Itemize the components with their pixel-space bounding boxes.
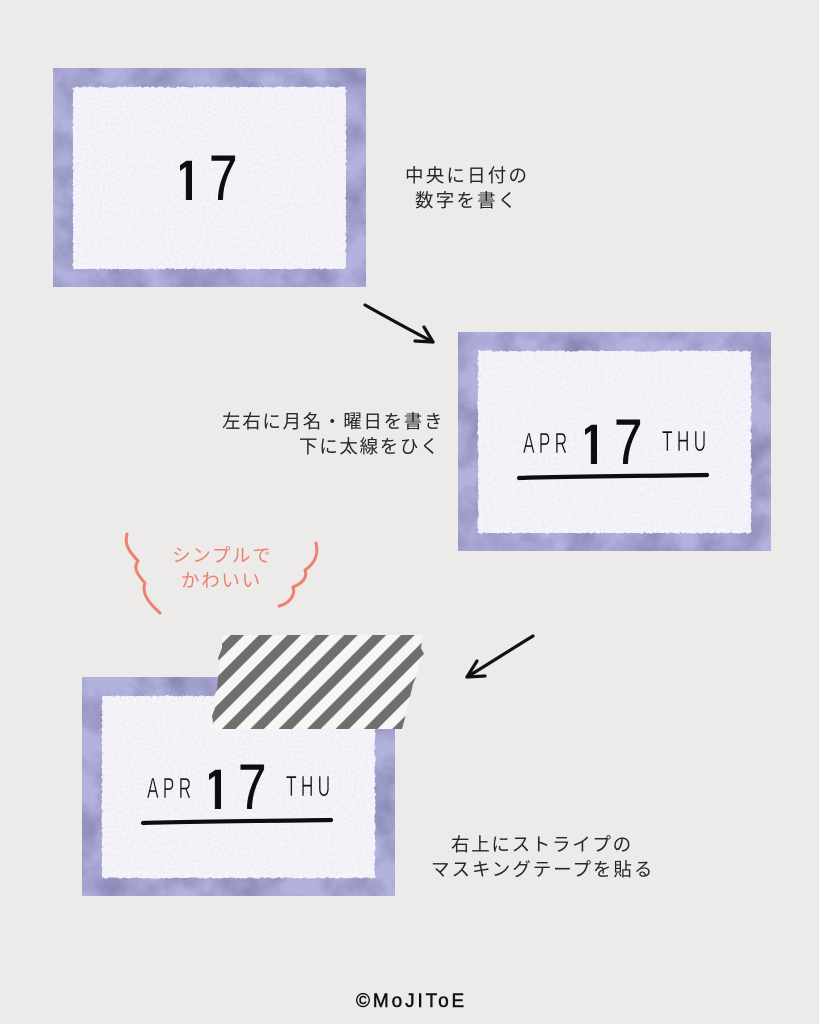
month label: APR xyxy=(523,428,571,460)
date number xyxy=(209,764,264,809)
arrow: step 2 to step 3 xyxy=(467,636,533,677)
text: step 1 caption xyxy=(405,165,529,211)
text: step 3 caption: マスキングテープを貼る xyxy=(431,859,654,880)
date number: 1 xyxy=(170,147,206,219)
panel: step 2 card xyxy=(458,332,771,551)
month label: APR xyxy=(147,773,195,805)
callout text: シンプルで xyxy=(172,545,272,566)
callout: simple and cute xyxy=(126,534,317,613)
text: step 3 caption: 右上にストライプの xyxy=(451,834,633,855)
date number: 7 xyxy=(614,408,642,478)
card border xyxy=(458,332,771,551)
text: step 1 caption: 中央に日付の xyxy=(405,165,529,186)
arrow: step 1 to step 2 xyxy=(365,305,433,342)
underline xyxy=(519,475,707,478)
masking tape xyxy=(210,635,424,729)
panel: step 1 card xyxy=(53,68,366,287)
underline xyxy=(143,820,331,823)
date number: 7 xyxy=(209,144,237,214)
text: step 2 caption: 下に太線をひく xyxy=(299,436,440,457)
card paper xyxy=(478,351,751,533)
date number: 1 xyxy=(199,756,235,828)
card paper xyxy=(73,87,346,269)
panel: step 3 card xyxy=(82,677,395,896)
date number: 7 xyxy=(238,753,266,823)
date number xyxy=(585,420,640,464)
callout: simple and cute: かわいい xyxy=(181,570,262,591)
card border xyxy=(53,68,366,287)
text: step 2 caption xyxy=(222,411,444,457)
left scallop xyxy=(126,534,160,613)
credit: ©MoJIToE xyxy=(356,991,467,1012)
date number: 1 xyxy=(575,411,611,483)
weekday label: THU xyxy=(662,426,710,458)
date number xyxy=(180,156,236,200)
card border xyxy=(82,677,395,896)
text: step 3 caption xyxy=(431,834,654,880)
text: step 2 caption: 左右に月名・曜日を書き xyxy=(222,411,444,432)
text: step 1 caption: 数字を書く xyxy=(415,190,519,211)
right scallop xyxy=(279,543,317,606)
card paper xyxy=(102,696,375,878)
weekday label: THU xyxy=(286,771,334,803)
